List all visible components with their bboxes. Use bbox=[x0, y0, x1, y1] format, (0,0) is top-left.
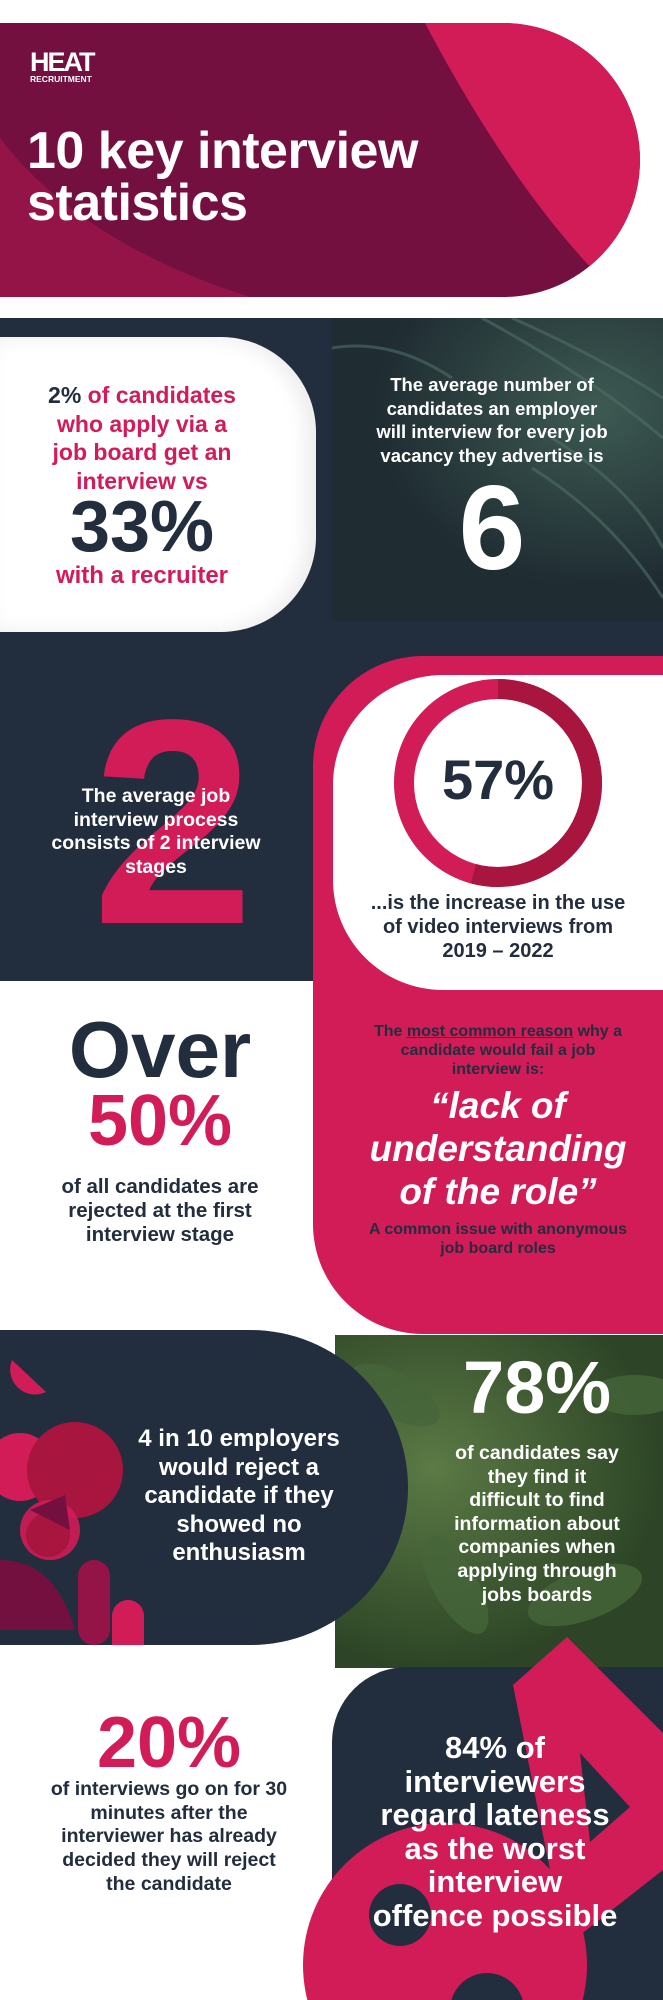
big number 2: 2 bbox=[92, 659, 244, 985]
section 2 left: big 2 bbox=[51, 659, 261, 985]
lack of understanding: interview is: bbox=[452, 1061, 544, 1078]
text: 78%: jobs boards bbox=[482, 1584, 592, 1606]
20% text: of interviews go on for 30 bbox=[51, 1778, 287, 1800]
text: average number 6: will interview for every job bbox=[376, 421, 608, 442]
section 2 left: big 2: consists of 2 interview bbox=[51, 832, 261, 854]
20% text: 20% bbox=[97, 1703, 241, 1783]
84% text: regard lateness bbox=[380, 1797, 610, 1832]
84% text: interview bbox=[428, 1864, 562, 1899]
lack of understanding: job board roles bbox=[440, 1240, 556, 1257]
white card with ring: ...is the increase in the use bbox=[371, 892, 625, 914]
photo: leaves dark bbox=[332, 318, 663, 621]
text: 78%: they find it bbox=[488, 1466, 586, 1488]
section 2 left: big 2: interview process bbox=[74, 808, 238, 830]
photo green bbox=[335, 1335, 663, 1668]
card: 2% vs 33%: 2% of candidates bbox=[48, 382, 236, 408]
84% text: interviewers bbox=[405, 1764, 585, 1798]
Over 50%: interview stage bbox=[86, 1223, 234, 1246]
ring chart bbox=[394, 679, 602, 887]
text: 78%: companies when bbox=[458, 1536, 616, 1558]
card: 2% vs 33% bbox=[0, 337, 316, 632]
text: average number 6: The average number of bbox=[390, 374, 594, 395]
card: 2% vs 33%: job board get an bbox=[53, 439, 231, 465]
lack of understanding bbox=[369, 1023, 627, 1257]
section 4 navy panel bbox=[332, 1667, 663, 2000]
text: 4 in 10 employers: 4 in 10 employers bbox=[138, 1425, 340, 1452]
section 2 left: big 2: The average job bbox=[82, 785, 230, 807]
title: statistics bbox=[27, 174, 247, 232]
text: 4 in 10 employers: enthusiasm bbox=[172, 1539, 306, 1566]
text: average number 6: vacancy they advertise is bbox=[380, 444, 604, 466]
text: 78%: information about bbox=[454, 1513, 620, 1535]
white card with ring bbox=[333, 675, 663, 990]
20% text: the candidate bbox=[106, 1873, 232, 1895]
Over 50%: Over bbox=[69, 1005, 251, 1094]
text: average number 6: candidates an employer bbox=[387, 398, 597, 418]
text: 78%: 78% bbox=[463, 1346, 611, 1429]
text: 78%: applying through bbox=[457, 1560, 617, 1582]
logo: HEAT bbox=[30, 47, 94, 77]
section 1 background bbox=[0, 318, 663, 981]
text: average number 6 bbox=[376, 374, 608, 595]
header banner bbox=[0, 23, 640, 297]
text: 78%: difficult to find bbox=[469, 1489, 605, 1511]
Over 50% bbox=[61, 1005, 259, 1246]
text: 4 in 10 employers: would reject a bbox=[159, 1454, 319, 1480]
20% text: interviewer has already bbox=[61, 1825, 277, 1847]
84% text: 84% of bbox=[445, 1730, 545, 1765]
text: 4 in 10 employers: showed no bbox=[176, 1510, 302, 1538]
text: 4 in 10 employers bbox=[138, 1425, 340, 1566]
section 2 left: big 2: stages bbox=[125, 856, 187, 878]
card: 2% vs 33%: who apply via a bbox=[57, 410, 227, 436]
20% text: minutes after the bbox=[90, 1802, 248, 1824]
logo: RECRUITMENT bbox=[30, 74, 92, 84]
pink panel bbox=[313, 656, 663, 1334]
text: average number 6: 6 bbox=[459, 461, 525, 595]
Over 50%: 50% bbox=[88, 1081, 232, 1161]
lack of understanding: A common issue with anonymous bbox=[369, 1221, 627, 1238]
20% text: decided they will reject bbox=[62, 1849, 276, 1871]
white card with ring: 57% bbox=[442, 748, 554, 811]
text: 4 in 10 employers: candidate if they bbox=[144, 1482, 334, 1509]
text: 78% bbox=[454, 1346, 620, 1606]
navy rounded panel with decor bbox=[0, 1330, 408, 1645]
Over 50%: of all candidates are bbox=[61, 1175, 259, 1198]
card: 2% vs 33%: interview vs bbox=[76, 468, 208, 494]
white card with ring: 2019 – 2022 bbox=[442, 940, 554, 962]
title: 10 key interview bbox=[27, 122, 418, 180]
lack of understanding: of the role” bbox=[399, 1171, 597, 1212]
20% text bbox=[51, 1703, 287, 1895]
84% text: offence possible bbox=[373, 1898, 617, 1932]
Over 50%: rejected at the first bbox=[68, 1199, 252, 1222]
decor: pink percent shape bbox=[303, 1637, 663, 2000]
84% text: as the worst bbox=[405, 1830, 585, 1866]
title bbox=[27, 122, 418, 232]
lack of understanding: understanding bbox=[370, 1128, 626, 1169]
text: 78%: of candidates say bbox=[455, 1442, 619, 1464]
84% text bbox=[373, 1730, 617, 1932]
card: 2% vs 33%: 33% bbox=[70, 487, 214, 567]
card: 2% vs 33%: with a recruiter bbox=[56, 562, 228, 589]
lack of understanding: “lack of bbox=[430, 1085, 566, 1126]
white card with ring: of video interviews from bbox=[383, 916, 613, 938]
lack of understanding: The most common reason why a bbox=[374, 1023, 622, 1040]
lack of understanding: candidate would fail a job bbox=[401, 1042, 595, 1059]
